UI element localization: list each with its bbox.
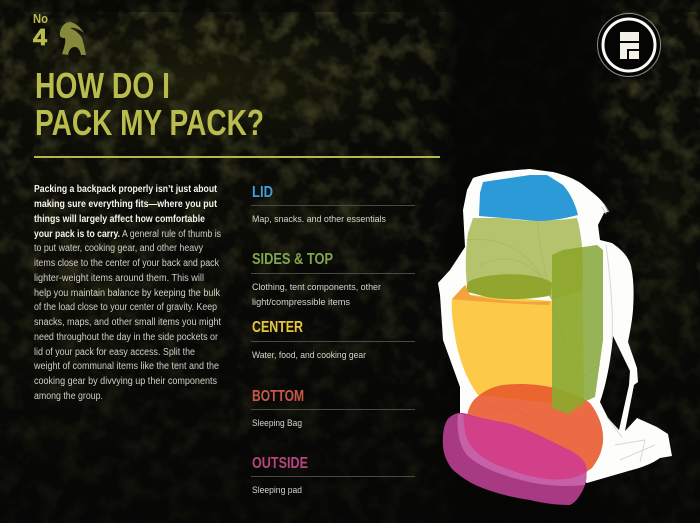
- logo: [598, 14, 660, 76]
- compartment: center top band: [452, 285, 550, 305]
- legend: bottom: BOTTOM: [252, 388, 304, 405]
- compartment: top overlap: [467, 274, 552, 299]
- legend: sides and top: [251, 251, 415, 308]
- intro text block: among the group.: [34, 391, 103, 402]
- backpack silhouette: [438, 169, 672, 483]
- sleeping pad highlight: [463, 414, 586, 480]
- title divider: [34, 156, 440, 158]
- icon: mountain goat: [60, 22, 86, 55]
- intro text block: weight of communal items like the tent and the: [33, 361, 219, 372]
- intro text block: snacks, maps, and other small items you might: [34, 317, 221, 328]
- intro text block: cooking gear by divvying up their components: [34, 376, 217, 387]
- intro text block: help you maintain balance by keeping the bulk: [34, 288, 221, 299]
- legend: lid: [251, 184, 415, 225]
- compartment: top: [466, 218, 583, 300]
- title: HOW DO I: [35, 65, 170, 106]
- issue number: [33, 11, 48, 50]
- legend: center: Water, food, and cooking gear: [252, 350, 366, 361]
- legend: sides and top: light/compressible items: [252, 297, 350, 308]
- intro text block: of the load close to your center of gravity. Keep: [34, 302, 217, 313]
- intro text block: need throughout the day in the side pockets or: [34, 332, 219, 343]
- legend: bottom: [251, 388, 415, 429]
- intro text block: lighter-weight items around them. This will: [34, 273, 204, 284]
- intro text block: items close to the center of your back and pack: [34, 258, 220, 269]
- legend: sides and top: Clothing, tent components, other: [252, 282, 381, 293]
- intro text block: Packing a backpack properly isn’t just about: [34, 184, 218, 195]
- intro text block: to put water, cooking gear, and other heavy: [34, 243, 203, 254]
- compartment: side pocket: [552, 245, 603, 414]
- compartment: bottom: [467, 384, 603, 480]
- legend: center: CENTER: [252, 319, 303, 336]
- intro text block: lid of your pack for easy access. Split the: [34, 347, 195, 358]
- issue number: 4: [33, 24, 47, 50]
- legend: lid: Map, snacks. and other essentials: [252, 214, 386, 225]
- sleeping pad rim: [457, 414, 586, 486]
- legend: sides and top: SIDES & TOP: [252, 251, 333, 268]
- compartment: side pocket inner: [552, 247, 584, 414]
- legend: outside: Sleeping pad: [252, 485, 302, 496]
- legend: bottom: Sleeping Bag: [252, 418, 302, 429]
- compartment: lid: [479, 175, 578, 221]
- backpack diagram: [438, 169, 672, 505]
- intro text block: A general rule of thumb is: [122, 229, 221, 240]
- pack seam lines: [466, 175, 655, 462]
- sleeping pad: [443, 413, 587, 505]
- intro text block: your pack is to carry.: [34, 229, 120, 240]
- legend: outside: OUTSIDE: [252, 455, 308, 472]
- intro text block: [33, 184, 221, 402]
- legend: lid: LID: [252, 184, 273, 201]
- title: PACK MY PACK?: [35, 102, 264, 143]
- legend: center: [251, 319, 415, 361]
- compartment: center: [452, 285, 552, 403]
- intro text block: things will largely affect how comfortable: [34, 214, 205, 225]
- intro text block: making sure everything fits—where you put: [34, 199, 218, 210]
- legend: outside: [251, 455, 415, 496]
- issue number: No: [33, 11, 48, 26]
- title: [35, 65, 264, 143]
